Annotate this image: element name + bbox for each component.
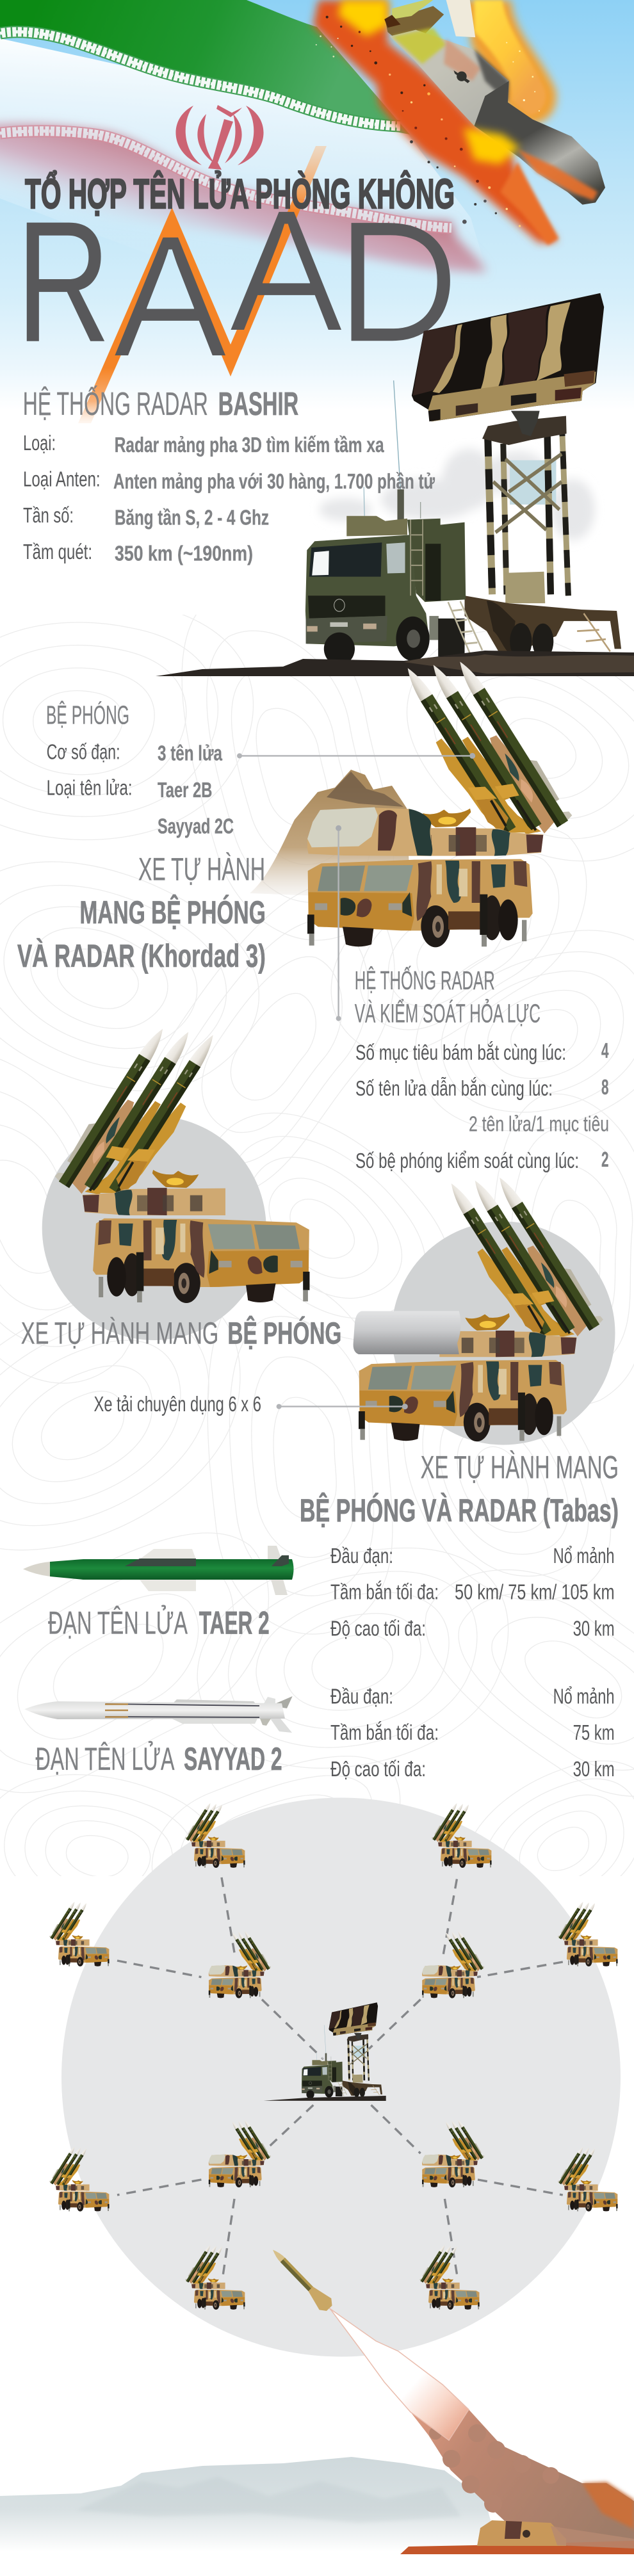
topographic contour background bbox=[0, 588, 634, 1962]
callout line: radar bbox=[336, 825, 341, 1021]
radar specs: Anten mảng pha với 30 hàng, 1.700 phần tử bbox=[113, 469, 435, 493]
radar specs: Tầm quét: bbox=[23, 540, 92, 563]
launcher, outer 2 bbox=[432, 1802, 492, 1868]
launcher specs: Cơ số đạn: bbox=[47, 740, 120, 764]
flying rocket bbox=[267, 2244, 336, 2314]
Taer 2 specs: 30 km bbox=[573, 1617, 615, 1640]
Taer 2 specs bbox=[330, 1544, 615, 1640]
upper white wing bbox=[446, 0, 475, 37]
Taer 2 heading: ĐẠN TÊN LỬA bbox=[48, 1605, 188, 1641]
Taer 2 specs: Đầu đạn: bbox=[330, 1544, 393, 1567]
Iran emblem bbox=[175, 105, 264, 170]
debris specks bbox=[316, 16, 540, 227]
launcher with radar, inner bottom right bbox=[422, 2119, 484, 2187]
heading: Tabas vehicle bbox=[300, 1450, 619, 1528]
launcher, outer 5 bbox=[49, 2146, 110, 2212]
launcher specs: Sayyad 2C bbox=[158, 814, 234, 838]
ground under radar truck bbox=[156, 651, 634, 676]
central radar bbox=[264, 2002, 386, 2101]
heading: Khordad 3 vehicle: MANG BỆ PHÓNG bbox=[79, 895, 266, 930]
deployment coverage circle bbox=[61, 1798, 621, 2356]
letter A first: A bbox=[113, 200, 229, 393]
radar specs: Loại Anten: bbox=[23, 467, 101, 491]
radar and fire control specs: HỆ THỐNG RADAR bbox=[355, 966, 495, 995]
lower drone wing burning bbox=[500, 162, 558, 245]
launcher, outer 1 bbox=[185, 1802, 245, 1868]
Tabas radar housing bbox=[354, 1311, 460, 1354]
Sayyad 2 specs: 30 km bbox=[573, 1757, 615, 1781]
radar and fire control specs: Số tên lửa dẫn bắn cùng lúc: bbox=[355, 1076, 553, 1100]
letter R: R bbox=[16, 185, 111, 378]
grey circle behind Tabas bbox=[392, 1222, 615, 1445]
launcher, outer 4 bbox=[558, 1901, 618, 1966]
Sayyad 2 specs: Đầu đạn: bbox=[330, 1685, 393, 1708]
launcher specs bbox=[46, 701, 234, 838]
radar and fire control specs: 4 bbox=[601, 1039, 609, 1062]
Sayyad 2 specs: 75 km bbox=[573, 1721, 615, 1744]
Sayyad 2 heading: ĐẠN TÊN LỬA bbox=[36, 1740, 175, 1777]
truck callout: Xe tải chuyên dụng 6 x 6 bbox=[93, 1392, 261, 1416]
yellow glow behind the drone bbox=[475, 0, 546, 115]
launcher, outer 7 bbox=[185, 2244, 245, 2310]
callout line: missile count bbox=[237, 753, 475, 759]
heading: Bashir radar system: BASHIR bbox=[218, 385, 298, 422]
flag pink kufic border bbox=[0, 131, 451, 228]
yellow fire core lower bbox=[464, 128, 520, 164]
Khordad 3 launcher vehicle bbox=[307, 658, 572, 947]
flag green band bbox=[0, 0, 410, 134]
heading: Khordad 3 vehicle bbox=[17, 851, 266, 974]
launcher with radar, inner top left bbox=[209, 1930, 271, 1998]
outer glow behind the drone bbox=[464, 0, 557, 124]
flag green kufic border bbox=[0, 32, 400, 126]
lower flames on nose bbox=[517, 149, 597, 200]
Iran flag bbox=[0, 0, 490, 320]
launch ground bbox=[400, 2541, 634, 2554]
grey circle behind launcher bbox=[42, 1116, 266, 1340]
Sayyad 2 missile bbox=[24, 1696, 293, 1733]
drone markings bbox=[453, 70, 470, 83]
orange lightning zigzag bbox=[78, 146, 327, 423]
letter A second: A bbox=[229, 174, 345, 368]
launcher specs: 3 tên lửa bbox=[158, 741, 222, 765]
launcher, outer 3 bbox=[49, 1901, 110, 1966]
flag pink band bbox=[0, 124, 487, 272]
radar specs: Loại: bbox=[23, 431, 56, 455]
sky background bbox=[0, 0, 634, 410]
radar specs: Tần số: bbox=[23, 503, 74, 527]
Bashir radar truck bbox=[305, 293, 621, 665]
heading: launcher vehicle: BỆ PHÓNG bbox=[227, 1315, 341, 1351]
heading: Khordad 3 vehicle: VÀ RADAR (Khordad 3) bbox=[17, 938, 266, 974]
radar specs: Radar mảng pha 3D tìm kiếm tầm xa bbox=[115, 433, 384, 457]
radar and fire control specs: 8 bbox=[601, 1075, 608, 1099]
Sayyad 2 heading: SAYYAD 2 bbox=[184, 1741, 282, 1777]
yellow fire core top bbox=[338, 0, 387, 36]
launcher specs: Loại tên lửa: bbox=[47, 776, 133, 800]
Sayyad 2 specs bbox=[330, 1685, 615, 1781]
Sayyad 2 specs: Độ cao tối đa: bbox=[330, 1757, 426, 1781]
network dashed links bbox=[117, 1877, 563, 2280]
launcher with radar, inner bottom left bbox=[209, 2119, 271, 2187]
drone tail bbox=[384, 0, 444, 50]
Taer 2 specs: Tầm bắn tối đa: bbox=[330, 1580, 439, 1603]
flag white field bbox=[0, 38, 490, 320]
Taer 2 missile bbox=[23, 1546, 293, 1595]
launcher, outer 6 bbox=[558, 2146, 618, 2212]
radar and fire control specs bbox=[355, 966, 609, 1172]
Tabas vehicle bbox=[354, 1174, 603, 1441]
radar specs bbox=[23, 431, 435, 565]
launcher at launch site bbox=[477, 2520, 634, 2548]
radar and fire control specs: Số mục tiêu bám bắt cùng lúc: bbox=[355, 1041, 566, 1064]
radar specs: 350 km (~190nm) bbox=[115, 542, 253, 565]
letter D: D bbox=[336, 186, 460, 378]
radar specs: Băng tần S, 2 - 4 Ghz bbox=[115, 506, 269, 529]
rocket plume bbox=[329, 2308, 469, 2440]
heading: Khordad 3 vehicle: XE TỰ HÀNH bbox=[138, 851, 265, 887]
fire band bbox=[313, 0, 558, 243]
launcher, outer 8 bbox=[419, 2244, 480, 2310]
radar and fire control specs: 2 bbox=[601, 1147, 608, 1171]
mountains bbox=[0, 2457, 500, 2554]
mountain behind launcher bbox=[250, 770, 410, 896]
launcher-only vehicle bbox=[55, 1025, 309, 1303]
heading: launcher vehicle: XE TỰ HÀNH MANG bbox=[21, 1316, 218, 1351]
launcher specs: Taer 2B bbox=[158, 778, 212, 802]
launch smoke bbox=[409, 2387, 634, 2549]
Taer 2 heading: TAER 2 bbox=[199, 1605, 270, 1641]
Sayyad 2 specs: Tầm bắn tối đa: bbox=[330, 1721, 439, 1744]
RAAD wordmark bbox=[16, 174, 460, 393]
launcher with radar, inner top right bbox=[422, 1930, 484, 1998]
launcher specs: BỆ PHÓNG bbox=[46, 701, 129, 730]
Taer 2 specs: Độ cao tối đa: bbox=[330, 1617, 426, 1640]
drone fuselage bbox=[390, 30, 509, 126]
heading: Bashir radar system: HỆ THỐNG RADAR bbox=[23, 385, 208, 422]
burning drone and fire bbox=[313, 0, 605, 245]
